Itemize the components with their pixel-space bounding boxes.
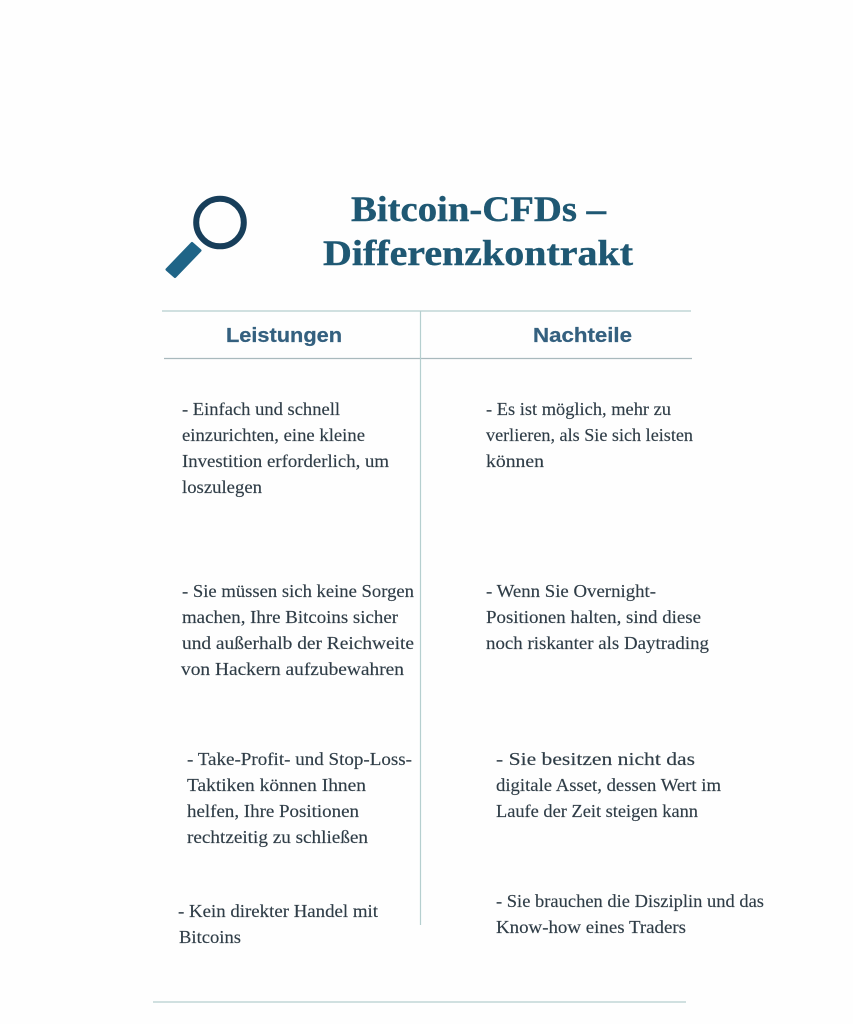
drawback 4: Know-how eines Traders [496, 917, 686, 937]
drawback 4: - Sie brauchen die Disziplin und das [496, 891, 764, 911]
benefit 4: Bitcoins [179, 927, 241, 947]
benefit 4: - Kein direkter Handel mit [178, 901, 378, 921]
benefit 4 [178, 901, 378, 947]
benefit 2: und außerhalb der Reichweite [182, 633, 414, 653]
drawback 1: - Es ist möglich, mehr zu [486, 399, 671, 419]
drawback 4 [496, 891, 764, 937]
drawback 2 [486, 581, 709, 653]
drawback 3: Laufe der Zeit steigen kann [496, 801, 698, 821]
benefit 3: - Take-Profit- und Stop-Loss- [187, 749, 412, 769]
benefit 2: von Hackern aufzubewahren [181, 659, 404, 679]
drawback 1: können [486, 451, 544, 471]
benefit 1: einzurichten, eine kleine [182, 425, 365, 445]
benefit 1: Investition erforderlich, um [182, 451, 389, 471]
title: Differenzkontrakt [323, 233, 633, 273]
drawback 1 [486, 399, 693, 471]
table rules [153, 311, 692, 1002]
benefit 1: - Einfach und schnell [182, 399, 340, 419]
benefit 2: machen, Ihre Bitcoins sicher [182, 607, 398, 627]
benefit 3 [187, 749, 412, 847]
benefit 3: Taktiken können Ihnen [187, 775, 366, 795]
drawback 3: - Sie besitzen nicht das [496, 749, 695, 769]
drawback 2: - Wenn Sie Overnight- [486, 581, 656, 601]
drawback 3 [496, 749, 721, 821]
drawback 2: noch riskanter als Daytrading [486, 633, 709, 653]
benefit 2: - Sie müssen sich keine Sorgen [182, 581, 414, 601]
icon: magnifying glass [167, 199, 244, 276]
heading: Leistungen: Leistungen [226, 325, 342, 347]
drawback 3: digitale Asset, dessen Wert im [496, 775, 721, 795]
heading: Nachteile: Nachteile [533, 325, 632, 347]
benefit 3: helfen, Ihre Positionen [187, 801, 359, 821]
benefit 1: loszulegen [182, 477, 262, 497]
title: Bitcoin-CFDs – [351, 189, 607, 229]
drawback 2: Positionen halten, sind diese [486, 607, 701, 627]
title [323, 189, 633, 273]
drawback 1: verlieren, als Sie sich leisten [486, 425, 693, 445]
benefit 1 [182, 399, 389, 497]
benefit 3: rechtzeitig zu schließen [187, 827, 368, 847]
benefit 2 [181, 581, 414, 679]
